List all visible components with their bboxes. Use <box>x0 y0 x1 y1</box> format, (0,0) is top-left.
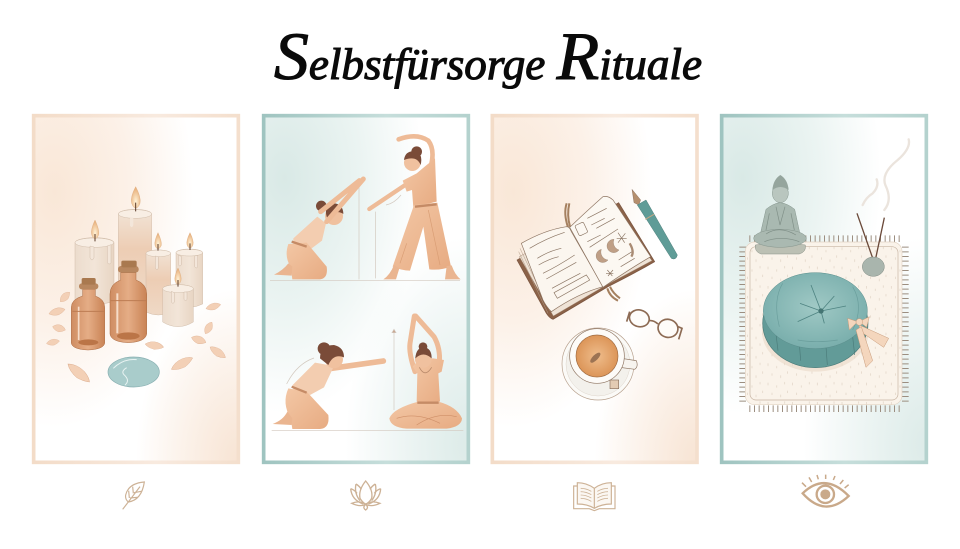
rug with fringe <box>743 239 905 409</box>
panel background <box>722 116 926 462</box>
incense holder and sticks <box>857 213 884 276</box>
crescent moons <box>596 239 619 263</box>
figure: seated with arms overhead <box>389 316 462 429</box>
glasses <box>627 308 682 340</box>
ribbon bow <box>848 317 889 367</box>
candles <box>75 209 203 327</box>
fountain pen <box>632 189 677 259</box>
icon: lotus <box>351 481 381 510</box>
open journal <box>517 196 655 319</box>
figure: kneeling with arms raised <box>274 179 363 279</box>
panel background <box>34 116 238 462</box>
panel background <box>492 116 697 462</box>
panel: journal and coffee <box>492 116 697 462</box>
coffee cup on saucer <box>562 328 637 400</box>
smoke <box>863 139 909 210</box>
panel background <box>264 116 468 462</box>
ground and guide lines <box>270 185 463 430</box>
figure: standing side stretch <box>369 136 461 279</box>
buddha statue <box>754 175 806 254</box>
blue stone <box>108 357 159 387</box>
panel: yoga poses <box>264 116 468 462</box>
panel: meditation space <box>722 116 926 462</box>
candle flames <box>91 187 193 287</box>
icon: leaf <box>123 482 144 509</box>
title: Selbstfürsorge Rituale <box>274 18 702 94</box>
teal cushion <box>762 273 869 372</box>
figure: kneeling with arm forward <box>273 342 383 429</box>
icon: open book <box>574 483 615 511</box>
panel: candles and essential oils <box>34 116 238 462</box>
flower petals <box>46 290 228 386</box>
journal handwriting <box>530 208 635 298</box>
oil bottles <box>71 261 147 350</box>
icon: eye <box>802 475 849 507</box>
